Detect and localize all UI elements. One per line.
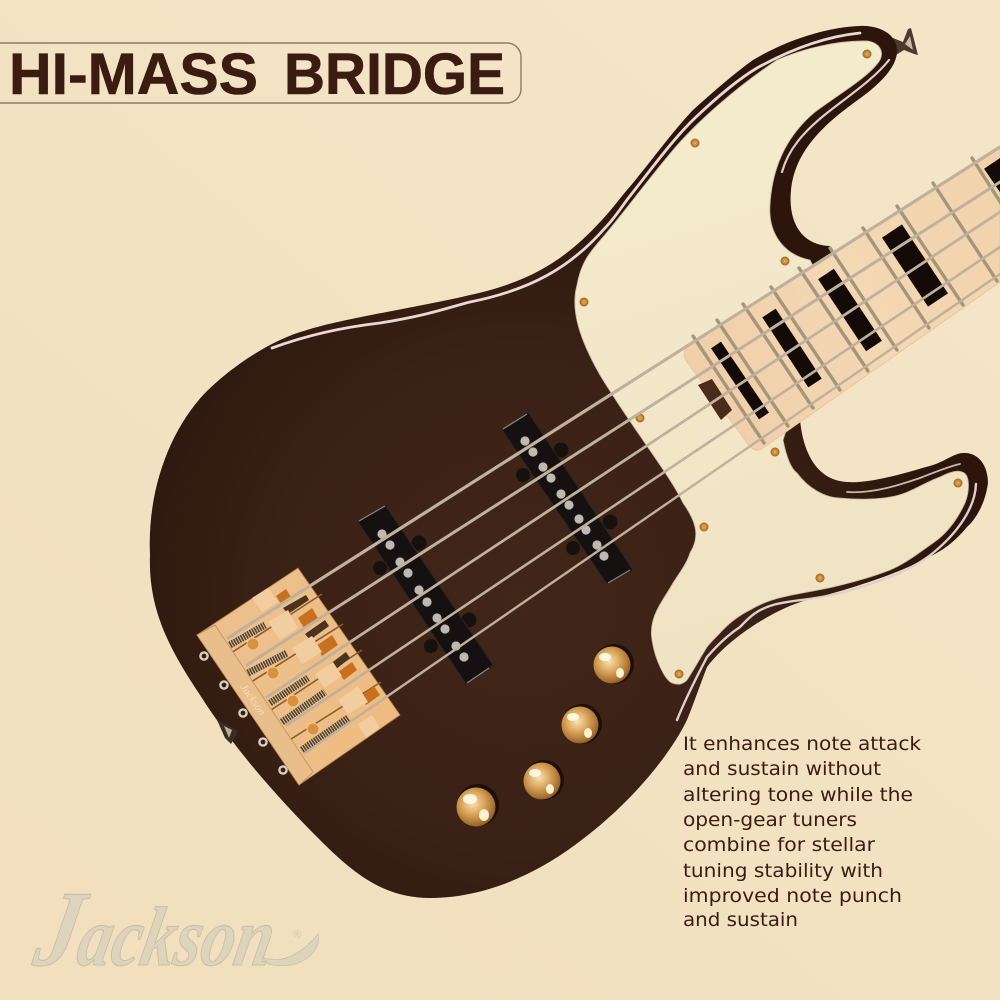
knob 2 [562,704,602,744]
description text: It enhances note attack [683,733,921,755]
saddle screws [247,638,319,735]
knob 4 [456,784,499,826]
neck pickup [502,412,633,584]
knob 1 [594,644,634,684]
logo swash [262,934,319,966]
bridge pickup [358,505,493,684]
description text: and sustain without [683,758,881,780]
bridge plate [197,568,400,785]
hi-mass bridge [197,568,400,785]
strap button: bottom [217,720,238,744]
string eyelets [200,652,287,774]
frets [693,158,1000,443]
description text: and sustain [683,909,798,931]
saddle shadows [276,589,380,705]
title text: BRIDGE [284,42,505,107]
maple neck [684,147,1000,450]
strings [228,147,1000,753]
strap button: top [893,28,918,55]
banner outline [0,43,521,103]
title banner [0,42,521,107]
bridge engraving: Jackson [238,682,268,718]
description text: tuning stability with [683,860,883,882]
saddle gaps [228,594,381,741]
description text: altering tone while the [683,784,913,806]
logo wordmark: J [26,870,96,989]
description text: combine for stellar [683,834,875,856]
bridge tail bar [197,625,313,785]
registered mark: ® [293,929,301,941]
description text [683,733,921,931]
saddle springs [230,625,348,750]
pickguard screws [580,50,962,678]
description text: improved note punch [683,885,902,907]
bass guitar [150,26,1000,898]
control knobs [456,644,634,826]
title text: HI-MASS [9,42,258,107]
block inlays [716,162,1000,416]
jackson logo [26,870,319,989]
knob 3 [524,760,564,800]
fretboard cavity [698,379,732,420]
description text: open-gear tuners [683,809,857,831]
pickguard [575,41,968,684]
logo wordmark: ackson [71,890,284,984]
body edge highlights [272,33,976,720]
guitar body [150,26,988,898]
saddle blocks [252,588,380,738]
